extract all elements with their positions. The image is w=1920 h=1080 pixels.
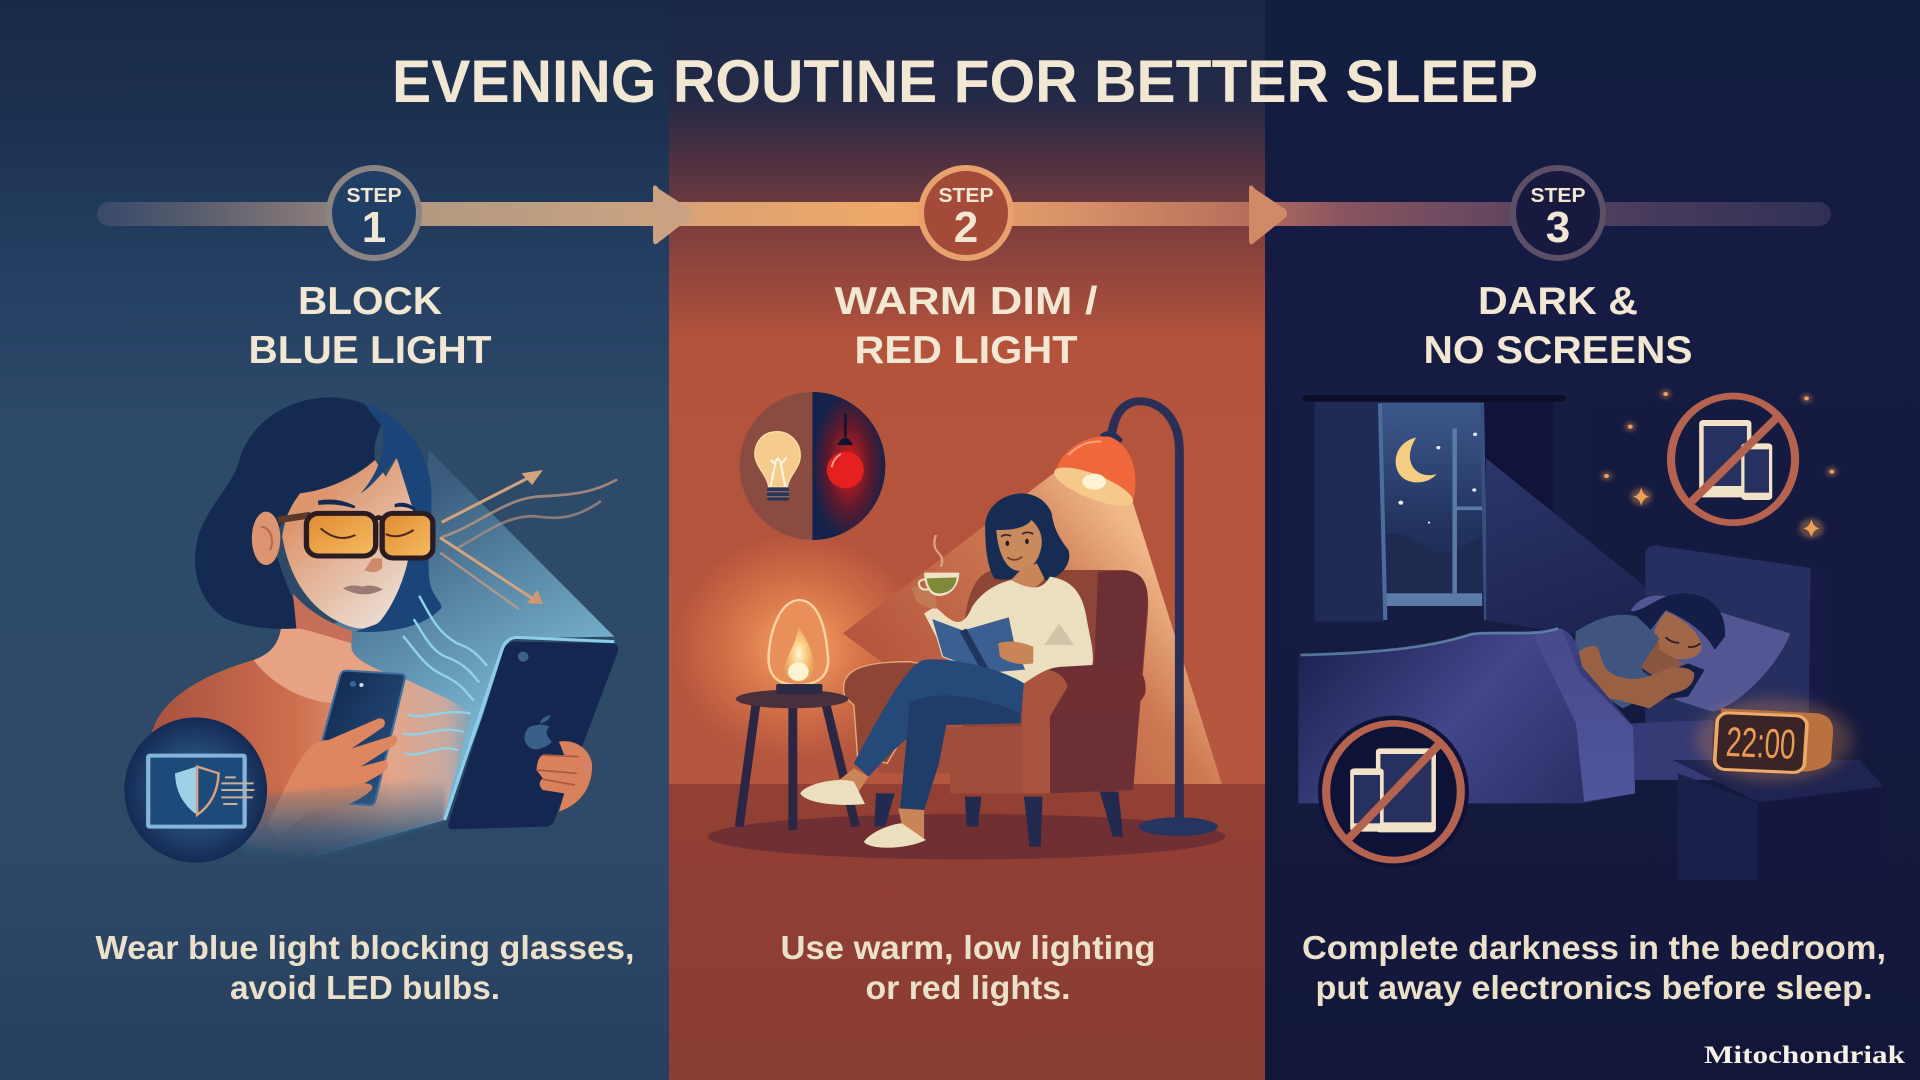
alarm clock: [1696, 698, 1851, 782]
caption: step 2: [780, 929, 1156, 1006]
heading: dark and no screens: DARK &: [1478, 280, 1638, 323]
heading: warm dim red light: [834, 280, 1098, 372]
caption: step 3: Complete darkness in the bedroom,: [1302, 929, 1886, 966]
heading: warm dim red light: WARM DIM /: [834, 280, 1098, 323]
side table with salt lamp: [736, 600, 856, 830]
hand on phone: [268, 718, 397, 837]
step 1 badge: 1: [362, 203, 386, 252]
caption: step 3: put away electronics before sleep.: [1316, 969, 1872, 1006]
floor lamp: [1049, 401, 1218, 836]
caption: step 1: [96, 929, 634, 1006]
caption: step 2: Use warm, low lighting: [780, 929, 1156, 966]
step 1 badge: STEP: [346, 185, 402, 207]
panel: step 1 background: [0, 0, 669, 1080]
panel: step 2 background: [669, 0, 1265, 1080]
icon: bulb comparison: [740, 392, 885, 540]
panel: step 3 background: [1265, 0, 1920, 1080]
icon: no devices bottom: [1318, 716, 1469, 868]
icon: shield screen: [124, 717, 267, 863]
step 2 badge: [921, 168, 1011, 258]
illustration: woman with glasses and devices: [124, 397, 618, 863]
tea cup: [911, 535, 959, 609]
headboard: [1645, 545, 1829, 733]
sleeping woman: [1568, 593, 1725, 708]
hand on tablet: [536, 741, 592, 812]
heading: block blue light: BLOCK: [298, 280, 442, 323]
face: [282, 458, 413, 628]
phone: [321, 671, 405, 805]
watermark: Mitochondriak: [1704, 1042, 1905, 1069]
tablet: [448, 642, 618, 829]
illustration: sleeping in dark bedroom: [1280, 380, 1884, 880]
alarm clock: 22:00: [1725, 718, 1797, 768]
title: EVENING ROUTINE FOR BETTER SLEEP: [392, 48, 1538, 115]
light cone: [843, 473, 1222, 784]
heading: block blue light: [248, 280, 492, 372]
caption: step 3: [1302, 929, 1886, 1006]
step 3 badge: 3: [1546, 203, 1570, 252]
caption: step 1: avoid LED bulbs.: [230, 969, 500, 1006]
step 2 badge: STEP: [938, 185, 994, 207]
caption: step 1: Wear blue light blocking glasses,: [96, 929, 634, 966]
curtains: [1315, 402, 1384, 622]
light waves: [404, 597, 486, 754]
glasses: [278, 515, 311, 520]
bed: [1631, 720, 1713, 780]
step 1 badge: [329, 168, 419, 258]
heading: dark and no screens: [1424, 280, 1692, 372]
reading woman: [800, 493, 1093, 848]
armchair: [844, 570, 1148, 847]
step 3 badge: STEP: [1530, 185, 1586, 207]
caption: step 2: or red lights.: [866, 969, 1070, 1006]
window: [1382, 403, 1484, 606]
hair: [195, 397, 386, 629]
illustration: woman reading in armchair: [673, 392, 1226, 859]
pillow: [1631, 595, 1790, 712]
heading: dark and no screens: NO SCREENS: [1424, 329, 1692, 372]
step 3 badge: [1513, 168, 1603, 258]
heading: block blue light: BLUE LIGHT: [248, 329, 492, 372]
step 2 badge: 2: [954, 203, 978, 252]
stars: [1601, 389, 1838, 538]
deflected arrows: [441, 475, 616, 608]
nightstand: [1673, 760, 1884, 880]
arrow: timeline: [97, 185, 1831, 244]
heading: warm dim red light: RED LIGHT: [854, 329, 1078, 372]
icon: no devices top: [1671, 396, 1795, 523]
